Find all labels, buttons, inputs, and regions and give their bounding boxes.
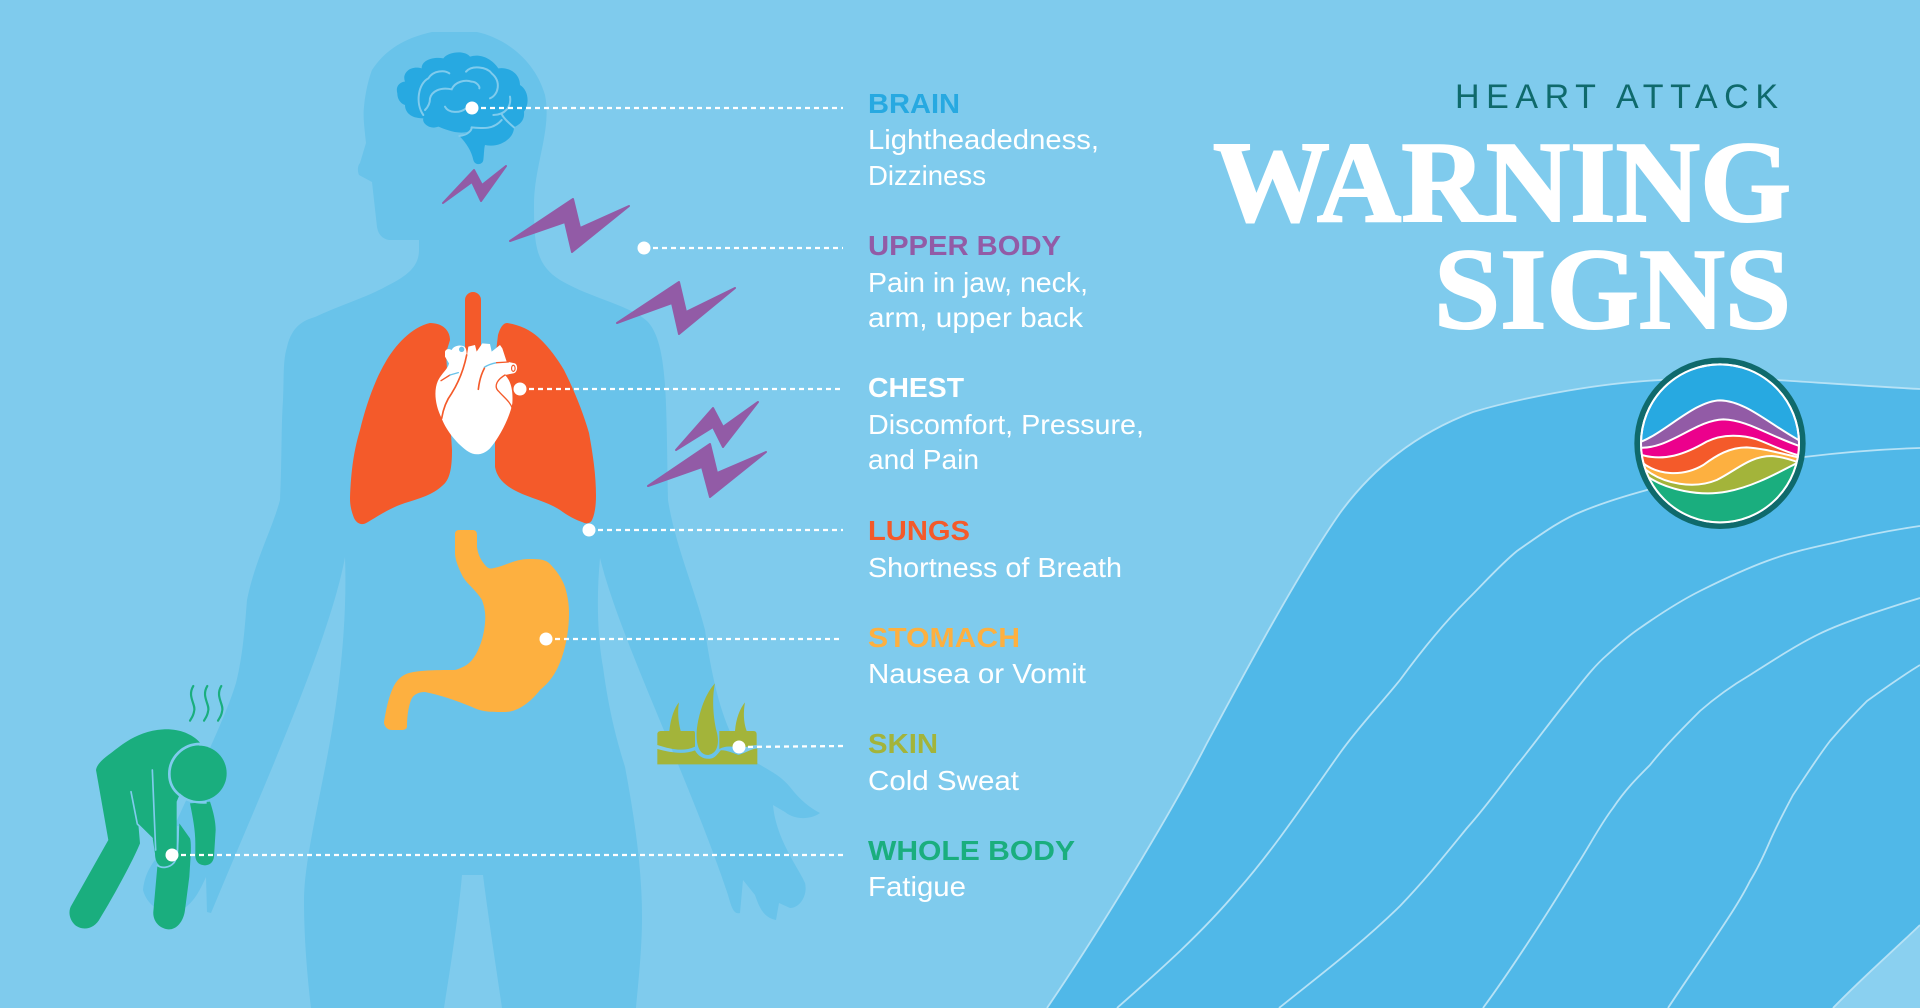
text: brain <box>868 88 1099 191</box>
bolt: jaw <box>510 199 629 252</box>
text: stomach: Nausea or Vomit <box>868 658 1086 689</box>
title: HEART ATTACK <box>1455 78 1778 116</box>
leader: skin <box>732 740 846 754</box>
leader: upper body <box>638 242 843 254</box>
text: chest: CHEST <box>868 372 964 403</box>
text: chest: Discomfort, Pressure, <box>868 409 1144 440</box>
title <box>1213 78 1791 354</box>
icon: fatigued person <box>69 686 227 929</box>
leader: stomach <box>540 632 843 646</box>
text: skin <box>868 728 1019 796</box>
text: upper body: Pain in jaw, neck, <box>868 267 1088 298</box>
text: lungs <box>868 515 1122 583</box>
leader: whole body <box>166 848 846 862</box>
leader: brain <box>466 102 843 114</box>
text: whole body <box>868 835 1075 902</box>
steam lines <box>190 686 222 721</box>
back arm <box>190 802 216 865</box>
title: SIGNS <box>1434 226 1791 354</box>
icon: logo <box>1637 361 1803 540</box>
leader: lungs <box>582 524 843 536</box>
front leg <box>153 823 191 929</box>
icon: stomach <box>384 530 569 730</box>
body slits <box>131 770 178 867</box>
text: lungs: LUNGS <box>868 515 970 546</box>
head <box>169 744 227 802</box>
icon: lightning bolts <box>443 166 766 497</box>
bolt: head <box>443 166 506 203</box>
text: skin: SKIN <box>868 728 938 759</box>
text: brain: Lightheadedness, <box>868 124 1099 155</box>
leader: chest <box>514 382 843 396</box>
text: whole body: WHOLE BODY <box>868 835 1075 866</box>
text: lungs: Shortness of Breath <box>868 552 1122 583</box>
text: skin: Cold Sweat <box>868 765 1019 796</box>
text: stomach <box>868 622 1086 689</box>
body silhouette <box>143 32 820 1008</box>
text: upper body: UPPER BODY <box>868 230 1061 261</box>
text: whole body: Fatigue <box>868 871 966 902</box>
bolt: shoulder <box>617 282 735 334</box>
icon: brain <box>397 52 528 164</box>
icon: lungs <box>350 292 596 524</box>
text: brain: BRAIN <box>868 88 960 119</box>
text: chest <box>868 372 1144 475</box>
icon: heart <box>435 343 517 454</box>
text: upper body <box>868 230 1088 333</box>
panel: background waves <box>1047 378 1920 1008</box>
title: WARNING <box>1213 119 1791 247</box>
icon: skin <box>657 683 757 764</box>
bolt: upper arm <box>676 402 758 450</box>
text: chest: and Pain <box>868 444 979 475</box>
text: stomach: STOMACH <box>868 622 1020 653</box>
text: brain: Dizziness <box>868 160 986 191</box>
text: upper body: arm, upper back <box>868 302 1084 333</box>
torso, arm and back leg <box>69 729 200 928</box>
bolt: lower arm <box>648 444 766 497</box>
